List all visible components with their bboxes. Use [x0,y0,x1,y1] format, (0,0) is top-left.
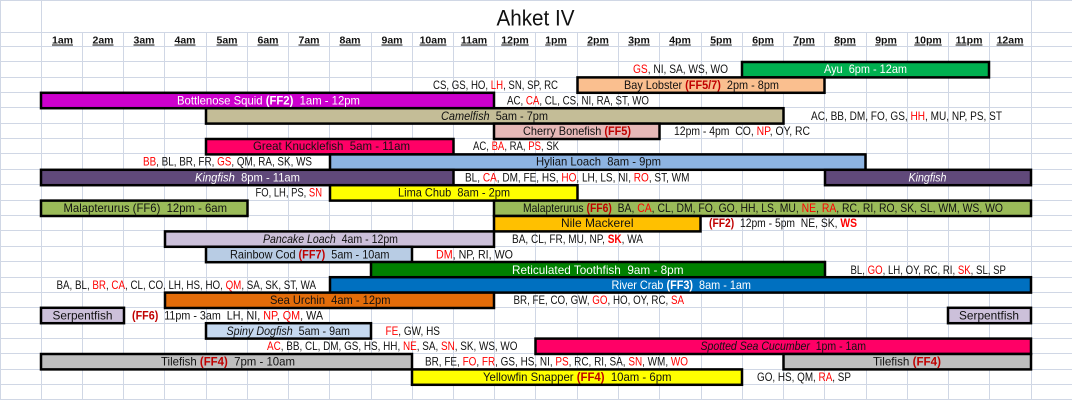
row: Bottlenose Squid: AC, CA, CL, CS, NI, RA, ST, WO [507,94,649,108]
row: Bottlenose Squid: Bottlenose Squid (FF2) 1am - 12pm [177,94,360,108]
hour header row: 4am [174,34,196,46]
row: Pancake Loach: Pancake Loach 4am - 12pm [263,232,398,246]
title: Ahket IV [496,6,575,30]
row: Malapterurus: Malapterurus (FF6) BA, CA, CL, DM, FO, GO, HH, LS, MU, NE, RA, RC, RI, RO, SK, SL, WM, WS, WO [523,201,1003,215]
row: Sea Urchin: BR, FE, CO, GW, GO, HO, OY, RC, SA [514,293,684,307]
row: Camelfish [206,108,1003,124]
hour header row: 4pm [669,34,691,46]
row: Serpentfish: (FF6) 11pm - 3am LH, NI, NP, QM, WA [132,308,323,322]
row: Pancake Loach: BA, CL, FR, MU, NP, SK, WA [512,232,643,246]
row: River Crab [56,277,1031,293]
row: Spotted Sea Cucumber: Spotted Sea Cucumber 1pm - 1am [700,339,866,353]
row: Ayu [633,62,989,77]
row: Bay Lobster: Bay Lobster (FF5/7) 2pm - 8pm [624,78,779,92]
hour header row: 10pm [914,34,942,46]
hour header row: 8pm [834,34,856,46]
hour header row: 8am [339,34,361,46]
row: Tilefish: BR, FE, FO, FR, GS, HS, NI, PS, RC, RI, SA, SN, WM, WO [425,354,688,368]
row: Hylian Loach [143,154,866,170]
hour header row: 5pm [710,34,732,46]
row: Yellowfin Snapper: Yellowfin Snapper (FF4) 10am - 6pm [483,370,672,384]
row: Serpentfish: Serpentfish [959,308,1019,322]
row: Kingfish: Kingfish 8pm - 11am [195,170,300,184]
row: River Crab: River Crab (FF3) 8am - 1am [612,278,751,292]
row: Ayu: Ayu 6pm - 12am [824,62,907,76]
row: Bay Lobster: CS, GS, HO, LH, SN, SP, RC [433,78,558,92]
hour header row: 7pm [793,34,815,46]
row: Rainbow Cod: DM, NP, RI, WO [436,248,513,262]
row: Pancake Loach [165,231,643,247]
row: Reticulated Toothfish: Reticulated Toothfish 9am - 8pm [512,263,684,277]
row: Great Knucklefish: AC, BA, RA, PS, SK [473,139,559,153]
hour header row: 11am [461,34,487,46]
row: Spotted Sea Cucumber [267,339,1031,354]
row: Great Knucklefish: Great Knucklefish 5am - 11am [253,139,410,153]
row: Serpentfish [41,308,1031,323]
row: Cherry Bonefish: 12pm - 4pm CO, NP, OY, RC [674,124,810,138]
hour header row: 5am [216,34,238,46]
hour header row: 3am [133,34,155,46]
row: Kingfish: BL, CA, DM, FE, HS, HO, LH, LS, NI, RO, ST, WM [465,170,690,184]
hour header row: 6pm [752,34,774,46]
row: Nile Mackerel: Nile Mackerel [561,216,634,230]
row: Reticulated Toothfish [371,262,1006,277]
row: Cherry Bonefish: Cherry Bonefish (FF5) [523,124,631,138]
row: Sea Urchin [165,293,684,308]
hour header row: 12pm [501,34,529,46]
row: Bay Lobster [433,77,824,93]
row: Yellowfin Snapper: GO, HS, QM, RA, SP [757,370,851,384]
row: Spiny Dogfish: Spiny Dogfish 5am - 9am [226,324,350,338]
row: Nile Mackerel: (FF2) 12pm - 5pm NE, SK, WS [709,216,857,230]
row: Camelfish: AC, BB, DM, FO, GS, HH, MU, NP, PS, ST [811,109,1003,123]
hour header row: 7am [298,34,320,46]
row: Cherry Bonefish [494,124,810,139]
row: Kingfish [41,170,1031,185]
row: Rainbow Cod: Rainbow Cod (FF7) 5am - 10am [230,248,390,262]
row: Lima Chub: Lima Chub 8am - 2pm [398,186,510,200]
hour header row: 9am [381,34,403,46]
row: Malapterurus: Malapterurus (FF6) 12pm - 6am [64,201,227,215]
row: Tilefish [41,354,1031,369]
row: Kingfish: Kingfish [908,170,947,184]
row: Ayu: GS, NI, SA, WS, WO [633,62,728,76]
hour header row: 10am [420,34,446,46]
row: Tilefish: Tilefish (FF4) 7pm - 10am [161,354,295,368]
row: Great Knucklefish [206,139,559,154]
row: Hylian Loach: BB, BL, BR, FR, GS, QM, RA, SK, WS [143,154,312,168]
row: Hylian Loach: Hylian Loach 8am - 9pm [536,154,661,168]
row: Rainbow Cod [206,247,513,262]
row: Bottlenose Squid [41,93,649,108]
hour header row: 2pm [587,34,609,46]
row: River Crab: BA, BL, BR, CA, CL, CO, LH, HS, HO, QM, SA, SK, ST, WA [56,278,316,292]
row: Spiny Dogfish: FE, GW, HS [386,324,440,338]
row: Spiny Dogfish [206,323,440,339]
row: Camelfish: Camelfish 5am - 7pm [441,109,548,123]
row: Reticulated Toothfish: BL, GO, LH, OY, RC, RI, SK, SL, SP [850,263,1006,277]
hour header row: 6am [257,34,279,46]
hour header row [52,34,1023,46]
row: Lima Chub: FO, LH, PS, SN [256,186,322,200]
row: Sea Urchin: Sea Urchin 4am - 12pm [270,293,390,307]
row: Serpentfish: Serpentfish [52,308,112,322]
hour header row: 1pm [545,34,567,46]
hour header row: 9pm [875,34,897,46]
hour header row: 1am [52,34,73,46]
row: Nile Mackerel [494,216,857,231]
row: Tilefish: Tilefish (FF4) [873,354,941,368]
row: Yellowfin Snapper [412,369,851,385]
row: Spotted Sea Cucumber: AC, BB, CL, DM, GS, HS, HH, NE, SA, SN, SK, WS, WO [267,339,518,353]
hour header row: 12am [997,34,1023,46]
hour header row: 2am [92,34,114,46]
row: Malapterurus [41,201,1031,216]
hour header row: 3pm [628,34,650,46]
row: Lima Chub [256,185,578,201]
hour header row: 11pm [956,34,982,46]
